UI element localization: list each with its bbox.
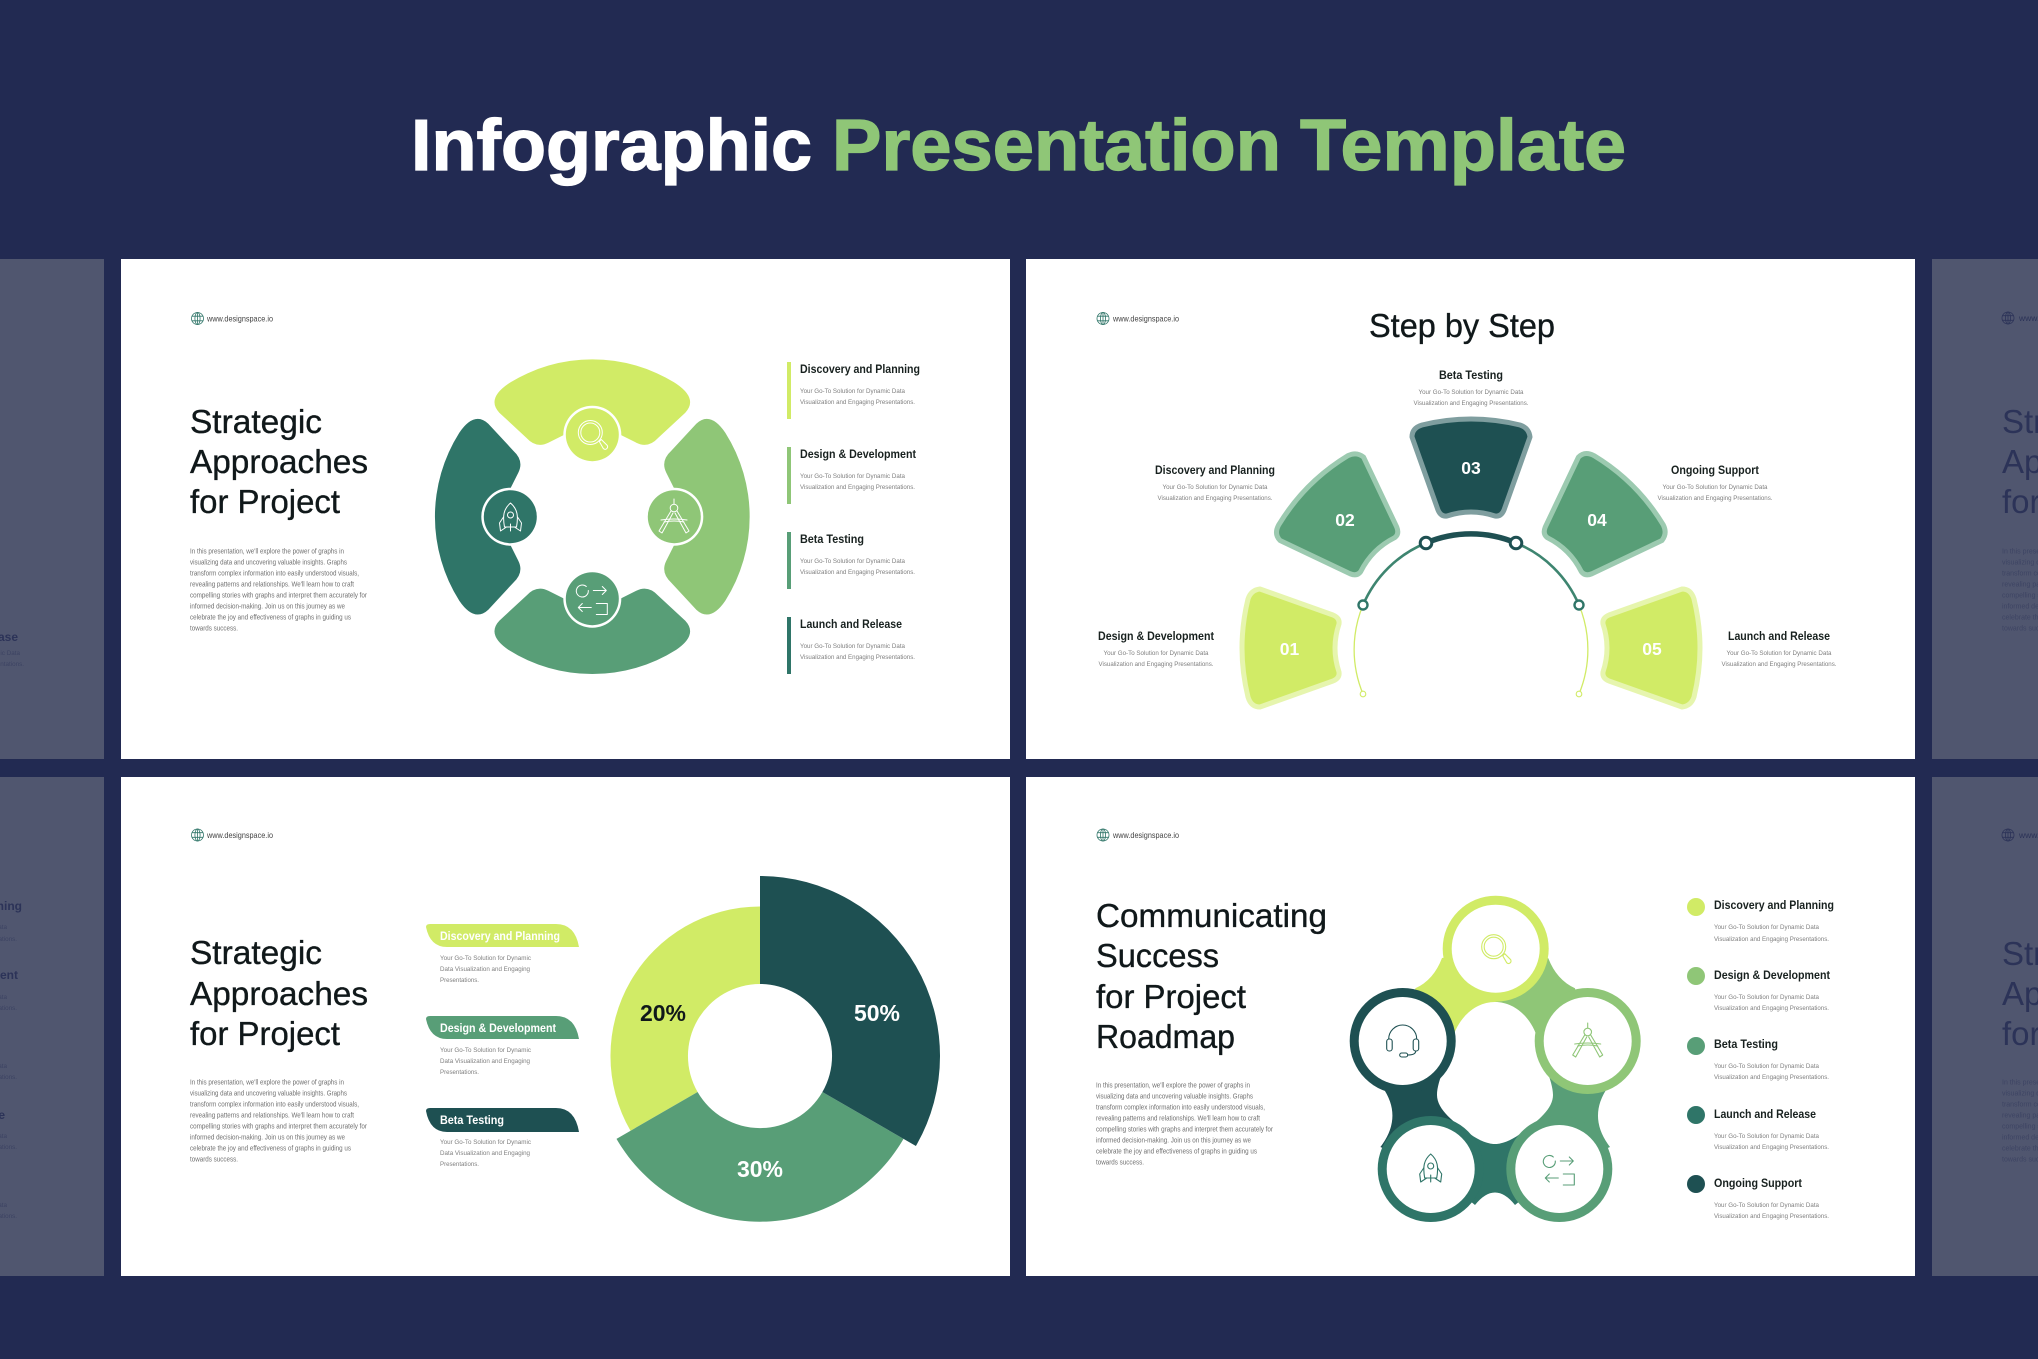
legend item: design and development: Visualization and Engaging Presentations. — [1714, 1005, 1829, 1012]
title: Template — [1300, 106, 1626, 186]
wheel diagram — [435, 359, 750, 674]
label: discovery and planning: Discovery and Planning — [1155, 463, 1275, 477]
panel: faded slide right top — [1932, 259, 2038, 759]
body text: revealing patterns and relationships. We'll learn how to craft — [190, 1112, 354, 1120]
segment: 20 percent: 20% — [640, 1000, 686, 1026]
tag item: discovery and planning — [426, 924, 579, 984]
icon: globe and url — [192, 829, 273, 841]
legend item: beta testing — [1687, 1037, 1829, 1081]
heading: Step by Step — [1369, 307, 1555, 344]
legend item: design and development: Your Go-To Solution for Dynamic Data — [1714, 994, 1819, 1001]
wheel segment: top — [494, 359, 690, 464]
heading — [190, 934, 368, 1052]
arc connector — [1354, 534, 1588, 697]
panel: slide 2 step by step — [1026, 259, 1915, 759]
tag item: beta testing — [426, 1108, 579, 1168]
label: beta testing: Beta Testing — [1439, 368, 1503, 382]
title — [411, 106, 1626, 186]
tag item: beta testing: Data Visualization and Engaging — [440, 1150, 530, 1157]
label: beta testing — [1414, 368, 1529, 407]
label: design and development: Visualization and Engaging Presentations. — [1098, 661, 1214, 668]
icon: globe and url — [1097, 829, 1179, 841]
panel: faded slide left bottom — [0, 777, 104, 1276]
label: launch and release: Visualization and Engaging Presentations. — [1722, 661, 1837, 668]
tag item: discovery and planning: Your Go-To Solution for Dynamic — [440, 955, 531, 962]
panel: faded slide right bottom — [1932, 777, 2038, 1276]
body text: informed decision-making. Join us on this journey as we — [1096, 1138, 1251, 1144]
heading: Approaches — [190, 975, 368, 1012]
step 04 petal: 04 — [1587, 510, 1607, 530]
tag item: discovery and planning: Data Visualization and Engaging — [440, 966, 530, 973]
list item: launch and release — [787, 617, 915, 674]
body text: compelling stories with graphs and interpret them accurately for — [1096, 1126, 1274, 1134]
heading: Strategic — [190, 934, 322, 971]
step 01 petal: 01 — [1280, 639, 1299, 659]
body text: In this presentation, we'll explore the power of graphs in — [1096, 1082, 1250, 1090]
step 02 petal: 02 — [1335, 510, 1355, 530]
tag item: design and development: Your Go-To Solution for Dynamic — [440, 1047, 531, 1054]
list item: beta testing: Visualization and Engaging Presentations. — [800, 569, 915, 576]
label: discovery and planning — [1155, 463, 1275, 502]
list item: discovery and planning: Your Go-To Solution for Dynamic Data — [800, 388, 905, 395]
step 03 petal: 03 — [1461, 458, 1481, 478]
icon: magnifier — [578, 420, 608, 449]
panel: slide 1 strategic approaches wheel — [121, 259, 1010, 759]
wheel segment: bottom — [494, 570, 690, 674]
icon: globe and url — [1097, 312, 1179, 324]
legend item: launch and release: Launch and Release — [1714, 1107, 1816, 1121]
central white blob — [1437, 1002, 1553, 1144]
legend item: launch and release: Your Go-To Solution for Dynamic Data — [1714, 1133, 1819, 1140]
heading — [1096, 897, 1327, 1055]
heading: Success — [1096, 937, 1219, 974]
body text: compelling stories with graphs and interpret them accurately for — [190, 592, 368, 600]
body text: transform complex information into easily understood visuals, — [1096, 1104, 1265, 1112]
icon: globe and url: www.designspace.io — [1112, 830, 1179, 840]
segment: 20 percent — [610, 906, 760, 1131]
legend item: design and development: Design & Development — [1714, 968, 1830, 982]
label: design and development: Design & Development — [1098, 629, 1214, 643]
node: top magnifier — [1443, 896, 1549, 1002]
body text: towards success. — [190, 626, 238, 632]
segment: 50 percent: 50% — [854, 1000, 900, 1026]
list item: launch and release: Launch and Release — [800, 617, 902, 631]
node: right compass — [1535, 988, 1641, 1094]
legend item: ongoing support: Visualization and Engaging Presentations. — [1714, 1213, 1829, 1220]
tag item: discovery and planning: Discovery and Planning — [440, 929, 560, 943]
step 02 petal — [1267, 444, 1419, 596]
heading: Roadmap — [1096, 1018, 1235, 1055]
wheel segment: left — [435, 419, 539, 615]
label: beta testing: Visualization and Engaging Presentations. — [1414, 400, 1529, 407]
body text: informed decision-making. Join us on this journey as we — [190, 1134, 345, 1142]
connector: bottom left to left — [1380, 1041, 1495, 1169]
tag item: design and development — [426, 1016, 579, 1076]
legend item: ongoing support — [1687, 1175, 1829, 1220]
legend item: design and development — [1687, 967, 1830, 1012]
icon: globe and url: www.designspace.io — [206, 830, 273, 840]
title: Presentation — [832, 106, 1281, 186]
label: design and development — [1098, 629, 1214, 668]
segment: 50 percent — [760, 876, 940, 1146]
label: ongoing support: Ongoing Support — [1671, 463, 1759, 477]
icon: rocket — [500, 503, 522, 531]
tag item: beta testing: Presentations. — [440, 1161, 479, 1168]
legend item: discovery and planning: Visualization and Engaging Presentations. — [1714, 936, 1829, 943]
body text: informed decision-making. Join us on this journey as we — [190, 604, 345, 610]
label: launch and release: Your Go-To Solution for Dynamic Data — [1726, 650, 1832, 657]
label: ongoing support — [1658, 463, 1773, 502]
list item: discovery and planning: Discovery and Planning — [800, 362, 920, 376]
icon: globe and url: www.designspace.io — [1112, 314, 1179, 324]
donut chart — [610, 876, 940, 1222]
body text: In this presentation, we'll explore the power of graphs in — [190, 548, 344, 556]
legend item: ongoing support: Ongoing Support — [1714, 1176, 1802, 1190]
label: launch and release — [1722, 629, 1837, 668]
list item: design and development: Design & Development — [800, 447, 916, 461]
heading: Approaches — [190, 443, 368, 480]
connector: right to bottom right — [1495, 1041, 1610, 1169]
label: launch and release: Launch and Release — [1728, 629, 1830, 643]
list item: beta testing: Beta Testing — [800, 532, 864, 546]
tag item: design and development: Presentations. — [440, 1069, 479, 1076]
list item: launch and release: Your Go-To Solution for Dynamic Data — [800, 643, 905, 650]
tag item: discovery and planning: Presentations. — [440, 977, 479, 984]
icon: globe and url: www.designspace.io — [206, 314, 273, 324]
label: ongoing support: Visualization and Engaging Presentations. — [1658, 495, 1773, 502]
body text: In this presentation, we'll explore the power of graphs in — [190, 1080, 344, 1086]
body text: transform complex information into easily understood visuals, — [190, 570, 359, 578]
step 05 petal — [1603, 589, 1700, 707]
body text: compelling stories with graphs and interpret them accurately for — [190, 1124, 368, 1130]
panel: slide 4 communicating success — [1026, 777, 1915, 1276]
body text: visualizing data and uncovering valuable insights. Graphs — [190, 1090, 347, 1098]
body text: celebrate the joy and effectiveness of graphs in guiding us — [190, 614, 351, 622]
legend item: launch and release — [1687, 1106, 1829, 1151]
icon: compass — [659, 499, 689, 533]
body text — [1096, 1082, 1274, 1166]
body text: transform complex information into easily understood visuals, — [190, 1102, 359, 1108]
heading: for Project — [1096, 978, 1246, 1015]
list item: design and development — [787, 447, 916, 504]
body text: revealing patterns and relationships. We'll learn how to craft — [190, 582, 354, 588]
label: discovery and planning: Visualization and Engaging Presentations. — [1158, 495, 1273, 502]
legend item: beta testing: Visualization and Engaging Presentations. — [1714, 1074, 1829, 1081]
icon: process arrows — [576, 585, 607, 614]
list item: design and development: Your Go-To Solution for Dynamic Data — [800, 473, 905, 480]
step 05 petal: 05 — [1642, 639, 1662, 659]
tag item: beta testing: Your Go-To Solution for Dynamic — [440, 1139, 531, 1146]
icon: globe and url — [192, 312, 273, 324]
step 04 petal — [1523, 444, 1675, 596]
body text: towards success. — [190, 1156, 238, 1164]
panel: faded slide left top — [0, 259, 104, 759]
body text — [190, 1080, 368, 1164]
label: beta testing: Your Go-To Solution for Dynamic Data — [1418, 389, 1524, 396]
legend item: ongoing support: Your Go-To Solution for Dynamic Data — [1714, 1202, 1819, 1209]
body text — [190, 548, 368, 632]
body text: towards success. — [1096, 1160, 1144, 1166]
legend item: discovery and planning — [1687, 898, 1834, 943]
list item: launch and release: Visualization and Engaging Presentations. — [800, 654, 915, 661]
step 03 petal — [1412, 419, 1530, 516]
panel: slide 3 donut chart — [121, 777, 1010, 1276]
node: left headset — [1350, 988, 1456, 1094]
node: bottom right arrows — [1506, 1116, 1612, 1222]
list item: design and development: Visualization and Engaging Presentations. — [800, 484, 915, 491]
heading — [190, 403, 368, 520]
body text: visualizing data and uncovering valuable insights. Graphs — [1096, 1094, 1253, 1100]
ring network diagram — [1350, 896, 1641, 1222]
list item: discovery and planning: Visualization and Engaging Presentations. — [800, 399, 915, 406]
body text: celebrate the joy and effectiveness of graphs in guiding us — [1096, 1148, 1257, 1156]
legend item: discovery and planning: Your Go-To Solution for Dynamic Data — [1714, 924, 1819, 931]
tag item: design and development: Data Visualization and Engaging — [440, 1058, 530, 1065]
connector: left to top — [1403, 949, 1496, 1080]
heading: Communicating — [1096, 897, 1327, 934]
heading: for Project — [190, 1015, 340, 1052]
list item: beta testing: Your Go-To Solution for Dynamic Data — [800, 558, 905, 565]
legend item: discovery and planning: Discovery and Planning — [1714, 898, 1834, 912]
legend item: launch and release: Visualization and Engaging Presentations. — [1714, 1144, 1829, 1151]
list item: discovery and planning — [787, 362, 920, 419]
connector: top to right — [1495, 949, 1588, 1080]
body text: visualizing data and uncovering valuable insights. Graphs — [190, 560, 347, 566]
heading: Strategic — [190, 403, 322, 440]
step 01 petal — [1242, 589, 1339, 707]
title: Infographic — [411, 106, 812, 186]
body text: revealing patterns and relationships. We'll learn how to craft — [1096, 1116, 1260, 1122]
label: ongoing support: Your Go-To Solution for Dynamic Data — [1662, 484, 1768, 491]
wheel segment: right — [645, 419, 750, 615]
legend item: beta testing: Your Go-To Solution for Dynamic Data — [1714, 1063, 1819, 1070]
heading: for Project — [190, 483, 340, 520]
body text: celebrate the joy and effectiveness of graphs in guiding us — [190, 1146, 351, 1152]
label: discovery and planning: Your Go-To Solution for Dynamic Data — [1162, 484, 1268, 491]
label: design and development: Your Go-To Solution for Dynamic Data — [1104, 650, 1209, 657]
connector: bottom right to bottom left — [1431, 1080, 1559, 1205]
tag item: beta testing: Beta Testing — [440, 1113, 504, 1127]
node: bottom left rocket — [1378, 1116, 1484, 1222]
tag item: design and development: Design & Development — [440, 1021, 556, 1035]
segment: 30 percent: 30% — [737, 1156, 783, 1182]
list item: beta testing — [787, 532, 915, 589]
segment: 30 percent — [616, 1092, 904, 1222]
legend item: beta testing: Beta Testing — [1714, 1037, 1778, 1051]
